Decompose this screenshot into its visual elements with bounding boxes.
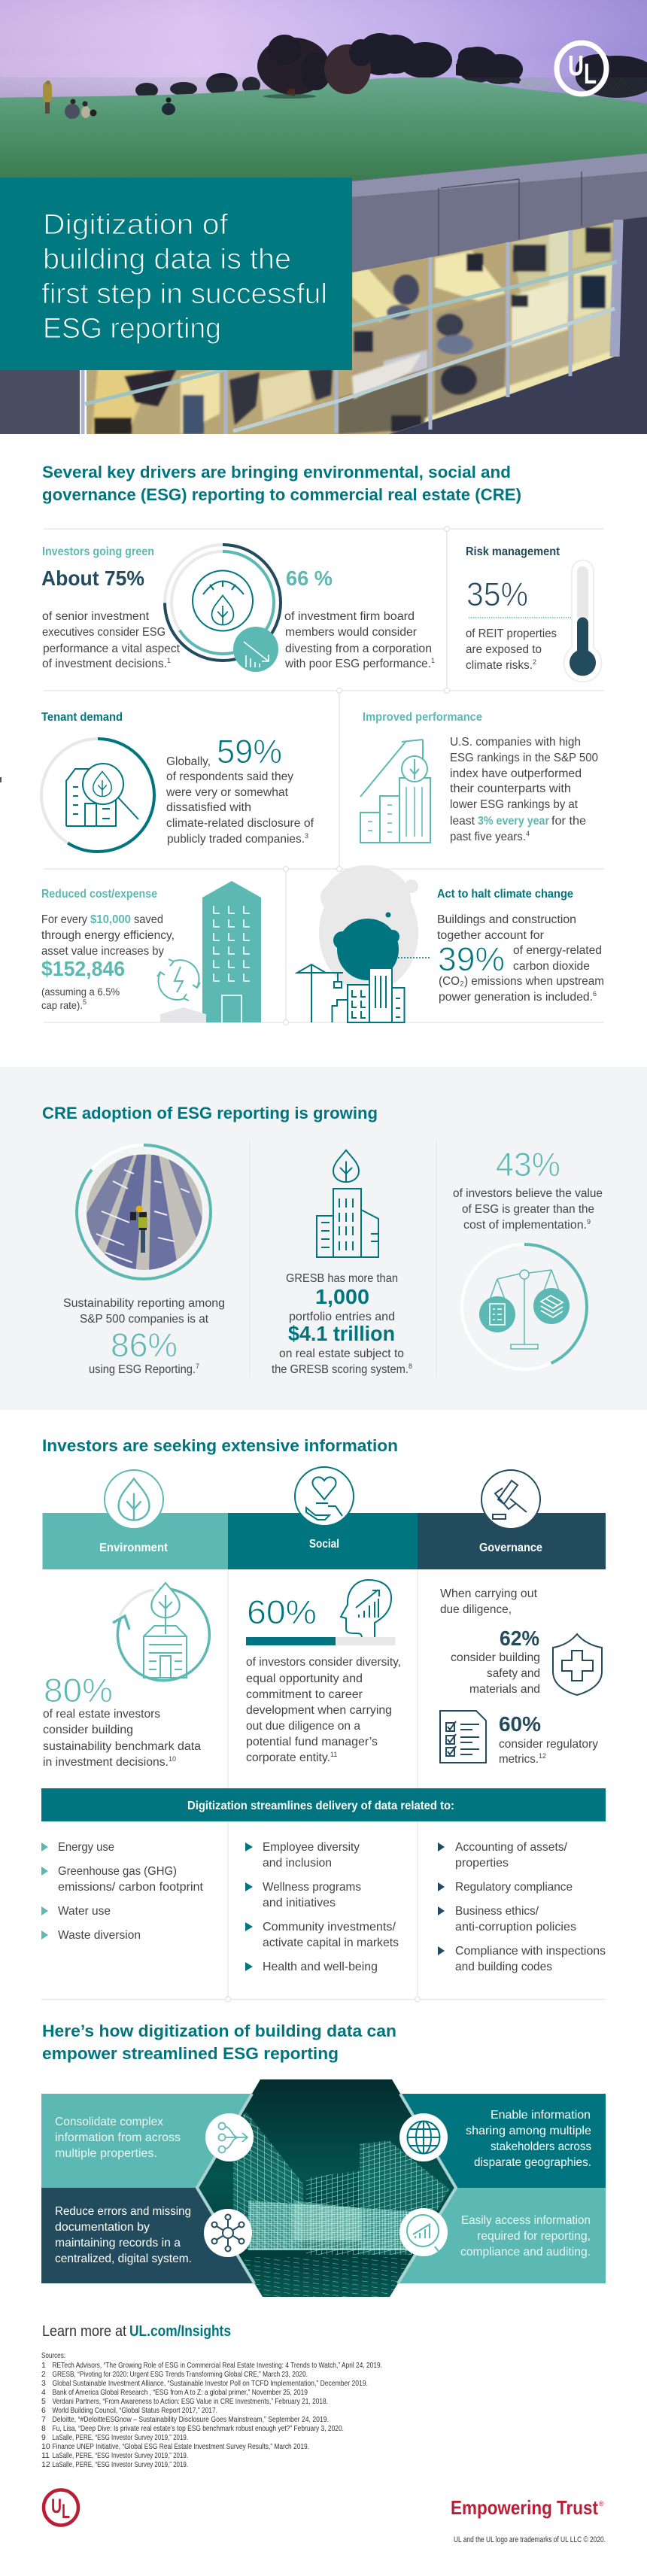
text: real estate investors: of real estate investors bbox=[43, 1708, 160, 1721]
text: savings: saved bbox=[134, 913, 163, 926]
panel: governance stat: When carrying out bbox=[440, 1587, 538, 1600]
sources list: Finance UNEP Initiative, “Global ESG Real Estate Investment Survey Results,” March 2019. bbox=[53, 2442, 309, 2451]
sources list: 3 bbox=[41, 2379, 46, 2388]
column headers: environment social governance: Governance bbox=[479, 1542, 542, 1554]
heading: CRE adoption of ESG reporting is growing bbox=[42, 1104, 378, 1122]
text: enable sharing: stakeholders across bbox=[491, 2140, 591, 2153]
text: savings: $152,846 bbox=[41, 957, 125, 980]
sources list bbox=[41, 2351, 382, 2469]
panel: reduced cost bbox=[41, 881, 261, 1022]
icon: UL logo red bbox=[44, 2490, 78, 2525]
text: GRESB: on real estate subject to bbox=[279, 1347, 404, 1360]
text: board members: members would consider bbox=[285, 626, 418, 639]
text: board members: divesting from a corporation bbox=[285, 642, 432, 655]
panel: risk management bbox=[466, 545, 602, 682]
sources list: LaSalle, PERE, “ESG Investor Survey 2019,” 2019. bbox=[53, 2433, 188, 2442]
list: social data: Employee diversity bbox=[263, 1841, 360, 1854]
background trees bbox=[135, 33, 647, 98]
text: board members bbox=[284, 610, 435, 670]
column headers: environment social governance: Environment bbox=[99, 1542, 168, 1554]
text: enable sharing bbox=[466, 2109, 591, 2169]
text: S&P 500: their counterparts with bbox=[450, 782, 571, 795]
text: real estate investors: consider building bbox=[43, 1724, 133, 1736]
text: 59% of respondents: 3 bbox=[305, 832, 308, 840]
sources list: 5 bbox=[41, 2397, 46, 2406]
list: environment data: Greenhouse gas (GHG) bbox=[58, 1865, 177, 1878]
text: savings bbox=[41, 913, 175, 1011]
text: GRESB: 1,000 bbox=[315, 1285, 369, 1308]
text: S&P 500: lower ESG rankings by at bbox=[450, 798, 579, 811]
stat: 62%: consider building bbox=[451, 1651, 540, 1664]
stat: 60% regulatory bbox=[499, 1712, 598, 1766]
text: 43% of investors: cost of implementation. bbox=[463, 1219, 587, 1232]
stat: about 75%: About 75% bbox=[41, 567, 144, 590]
panel: tenant demand: Tenant demand bbox=[41, 711, 123, 724]
list: environment data: Waste diversion bbox=[58, 1929, 141, 1942]
text: enable sharing: Enable information bbox=[491, 2109, 591, 2122]
foreground trees bbox=[257, 35, 373, 99]
text: diversity: 11 bbox=[330, 1751, 337, 1758]
text: reduce errors bbox=[55, 2205, 192, 2265]
window mullions and transoms bbox=[83, 220, 618, 434]
sources list: 6 bbox=[41, 2406, 46, 2415]
text: enable sharing: sharing among multiple bbox=[466, 2125, 591, 2137]
sources list: 12 bbox=[41, 2460, 50, 2469]
panel: tenant demand bbox=[41, 711, 314, 852]
column headers: environment social governance: Social bbox=[309, 1538, 339, 1551]
icon: checklist bbox=[440, 1711, 486, 1763]
text: 39% of emissions: carbon dioxide bbox=[513, 960, 590, 973]
text: 39% of emissions: 6 bbox=[593, 990, 597, 998]
icon: governance gavel bbox=[481, 1470, 540, 1529]
list: social data: Health and well-being bbox=[263, 1961, 378, 1973]
panel: investors going green bbox=[41, 545, 435, 672]
text: GRESB bbox=[272, 1272, 412, 1376]
text: 59% of respondents bbox=[166, 734, 314, 846]
text: 39% of emissions: together account for bbox=[437, 929, 545, 942]
sources list: Verdani Partners, “From Awareness to Action: ESG Value in CRE Investments,” February 21, 2018. bbox=[53, 2397, 328, 2406]
stat: 62% bbox=[451, 1627, 540, 1696]
text: 39% of emissions: power generation is included. bbox=[439, 991, 593, 1004]
list: governance data: anti-corruption policies bbox=[455, 1921, 576, 1934]
panel: benefit quadrants bbox=[41, 2079, 606, 2297]
text: S&P 500: index have outperformed bbox=[450, 767, 582, 780]
office window interior bbox=[87, 222, 615, 434]
text: GRESB: $4.1 trillion bbox=[288, 1322, 395, 1345]
text: sustainability reporting: Sustainability reporting among bbox=[63, 1297, 225, 1310]
text: real estate investors bbox=[43, 1708, 201, 1769]
icon: UL logo red: L bbox=[62, 2500, 70, 2523]
text: 43% of investors: 9 bbox=[587, 1218, 591, 1226]
sources list: GRESB, “Pivoting for 2020: Urgent ESG Trends Transforming Global CRE,” March 23, 2020. bbox=[53, 2370, 308, 2379]
text: diversity: potential fund manager’s bbox=[246, 1736, 378, 1748]
list: governance data: Compliance with inspections bbox=[455, 1945, 606, 1958]
text: diversity: out due diligence on a bbox=[246, 1720, 360, 1733]
text: board members: of investment firm board bbox=[284, 610, 415, 623]
icon: UL logo red: U bbox=[51, 2495, 62, 2517]
icon: rising bars and leaf bbox=[360, 740, 430, 843]
chart: 43% ring with scale bbox=[462, 1244, 587, 1369]
sources list: Fu, Lisa, “Deep Dive: Is private real estate’s top ESG benchmark robust enough yet?” February 3, 2020. bbox=[53, 2424, 344, 2433]
text: savings: through energy efficiency, bbox=[41, 929, 175, 942]
banner: digitization streamlines bbox=[41, 1788, 606, 1821]
list: environment data: Energy use bbox=[58, 1841, 114, 1854]
text: 59% of respondents: 59% bbox=[217, 734, 282, 770]
list: governance data: properties bbox=[455, 1857, 509, 1870]
graphic: tree and city bbox=[297, 865, 430, 1022]
icon: UL logo white: U bbox=[568, 50, 584, 82]
panel: risk management: Risk management bbox=[466, 545, 560, 558]
text: 59% of respondents: of respondents said they bbox=[166, 770, 293, 783]
list: social data: and inclusion bbox=[263, 1857, 332, 1870]
text: 59% of respondents: were very or somewhat bbox=[166, 786, 289, 799]
people on the lawn bbox=[43, 80, 175, 119]
list: social data: Wellness programs bbox=[263, 1881, 361, 1894]
text: diversity bbox=[246, 1656, 401, 1764]
text: real estate investors: in investment decisions. bbox=[43, 1756, 169, 1769]
heading: how digitization empowers bbox=[42, 2022, 396, 2063]
banner: digitization streamlines: Digitization streamlines delivery of data related to: bbox=[187, 1800, 454, 1812]
stat: 62%: materials and bbox=[469, 1683, 540, 1696]
list: governance data: Accounting of assets/ bbox=[455, 1841, 568, 1854]
hero title panel: first step in successful bbox=[41, 278, 327, 310]
text: REIT: of REIT properties bbox=[466, 627, 557, 640]
icon: network bbox=[204, 2209, 252, 2257]
lawn bbox=[0, 77, 647, 181]
text: senior executives: of senior investment bbox=[42, 610, 150, 623]
text: reduce errors: centralized, digital system. bbox=[55, 2252, 192, 2265]
text: REIT bbox=[466, 627, 557, 672]
text: easily access: required for reporting, bbox=[477, 2230, 591, 2243]
sources list: RETech Advisors, “The Growing Role of ESG in Commercial Real Estate Investing: 4 Trends to Watch,” April 24, 2019. bbox=[53, 2361, 382, 2370]
stat: 62%: safety and bbox=[487, 1667, 540, 1680]
text: 43% of investors bbox=[453, 1147, 603, 1232]
icon: leaf and buildings bbox=[317, 1150, 378, 1257]
icon: environment leaf bbox=[105, 1470, 163, 1529]
text: GRESB: portfolio entries and bbox=[289, 1311, 395, 1323]
text: 43% of investors: of ESG is greater than the bbox=[462, 1203, 594, 1216]
text: sustainability reporting: 7 bbox=[196, 1362, 199, 1370]
sources list: 9 bbox=[41, 2433, 46, 2442]
text: board members: with poor ESG performance. bbox=[284, 658, 431, 670]
text: savings: For every bbox=[41, 913, 87, 926]
stat: 60% regulatory: metrics. bbox=[499, 1753, 539, 1766]
panel: climate change: Act to halt climate change bbox=[437, 888, 573, 901]
heading: investors seeking information: Investors are seeking extensive information bbox=[42, 1436, 398, 1455]
text: savings: cap rate). bbox=[41, 999, 83, 1011]
text: S&P 500: for the bbox=[551, 815, 586, 828]
text: consolidate: Consolidate complex bbox=[55, 2116, 163, 2128]
text: savings: (assuming a 6.5% bbox=[41, 986, 120, 998]
text: 39% of emissions bbox=[437, 913, 604, 1004]
icon: thermometer bbox=[563, 560, 602, 682]
list: governance data: and building codes bbox=[455, 1961, 552, 1973]
sources list: 10 bbox=[41, 2442, 50, 2451]
sources list: Bank of America Global Research , “ESG from A to Z: a global primer,” November 25, 2019 bbox=[53, 2388, 308, 2397]
tagline: empowering trust: ® bbox=[599, 2500, 604, 2508]
text: S&P 500: 3% every year bbox=[478, 815, 549, 828]
text: S&P 500: least bbox=[450, 815, 475, 828]
text: S&P 500: U.S. companies with high bbox=[450, 736, 581, 749]
hero title panel: building data is the bbox=[43, 244, 291, 275]
list: social data bbox=[245, 1841, 399, 1973]
chart: 59% ring with building bbox=[41, 739, 154, 852]
heading: key drivers: Several key drivers are bringing environmental, social and bbox=[42, 463, 511, 481]
text: sustainability reporting: 86% bbox=[111, 1327, 178, 1364]
link: learn more bbox=[42, 2323, 231, 2340]
list: environment data: emissions/ carbon footprint bbox=[58, 1881, 204, 1894]
text: 59% of respondents: dissatisfied with bbox=[166, 801, 251, 814]
stat: 35%: 35% bbox=[466, 576, 528, 613]
text: savings: asset value increases by bbox=[41, 945, 164, 958]
text: enable sharing: disparate geographies. bbox=[474, 2156, 591, 2169]
text: GRESB: GRESB has more than bbox=[286, 1272, 398, 1285]
text: consolidate: information from across bbox=[55, 2131, 181, 2144]
panel: CRE adoption section bbox=[0, 1067, 647, 1410]
hero title panel: Digitization of bbox=[43, 209, 228, 241]
icon: teal building bbox=[202, 881, 261, 1022]
panel: governance stat: due diligence, bbox=[440, 1603, 512, 1616]
sources list: 2 bbox=[41, 2370, 46, 2379]
hero title panel: ESG reporting bbox=[43, 313, 221, 345]
text: reduce errors: Reduce errors and missing bbox=[55, 2205, 191, 2218]
text: diversity: commitment to career bbox=[246, 1688, 363, 1701]
text: reduce errors: documentation by bbox=[55, 2221, 150, 2234]
link: learn more: Learn more at bbox=[42, 2323, 126, 2340]
panel: environment stat bbox=[43, 1583, 209, 1769]
icon: building cycle bbox=[113, 1583, 209, 1681]
sources list: 8 bbox=[41, 2424, 46, 2433]
text: 39% of emissions: 39% bbox=[438, 941, 505, 978]
panel: environment stat: 80% bbox=[44, 1672, 113, 1709]
text: senior executives: executives consider ESG bbox=[42, 626, 166, 639]
sources list: 7 bbox=[41, 2415, 46, 2424]
panel: reduced cost: Reduced cost/expense bbox=[41, 888, 157, 901]
hero title panel bbox=[0, 178, 352, 370]
panel: social stat: 60% bbox=[247, 1594, 317, 1631]
icon: consolidate bbox=[205, 2113, 254, 2161]
icon: globe bbox=[399, 2113, 448, 2161]
text: GRESB: the GRESB scoring system. bbox=[272, 1363, 409, 1376]
text: easily access: Easily access information bbox=[461, 2214, 591, 2227]
text: 59% of respondents: Globally, bbox=[166, 755, 211, 768]
stat: 62%: 62% bbox=[500, 1627, 539, 1650]
icon: magnifier chart bbox=[399, 2208, 448, 2256]
stat: 66 %: 66 % bbox=[286, 567, 333, 590]
text: 59% of respondents: publicly traded companies. bbox=[167, 833, 305, 846]
image: wireframe city hexagon bbox=[197, 2079, 456, 2297]
list: environment data bbox=[41, 1841, 204, 1942]
bar chart: 60% bbox=[246, 1637, 396, 1645]
sources list: Global Sustainable Investment Alliance, “Sustainable Investor Poll on TCFD Implementation,” December 2019. bbox=[53, 2379, 368, 2388]
heading: key drivers: governance (ESG) reporting to commercial real estate (CRE) bbox=[42, 485, 521, 504]
list: social data: and initiatives bbox=[263, 1897, 336, 1909]
text: REIT: 2 bbox=[533, 658, 536, 666]
icon: UL logo white bbox=[557, 43, 606, 94]
sources list: 11 bbox=[41, 2451, 50, 2460]
trademark note: UL and the UL logo are trademarks of UL LLC © 2020. bbox=[454, 2535, 606, 2544]
text: 39% of emissions: Buildings and construction bbox=[437, 913, 576, 926]
chart: double ring gauge bbox=[165, 545, 281, 672]
heading: how digitization empowers: Here’s how digitization of building data can bbox=[42, 2022, 396, 2040]
text: S&P 500: 4 bbox=[526, 830, 530, 837]
text: S&P 500 bbox=[450, 736, 598, 843]
text: diversity: equal opportunity and bbox=[246, 1672, 363, 1685]
text: GRESB: 8 bbox=[409, 1362, 412, 1370]
icon: gray house bbox=[160, 1007, 206, 1022]
heading: how digitization empowers: empower streamlined ESG reporting bbox=[42, 2044, 339, 2063]
tagline: empowering trust: Empowering Trust bbox=[451, 2496, 598, 2519]
stat: 60% regulatory: consider regulatory bbox=[499, 1738, 598, 1751]
sources list: 1 bbox=[41, 2361, 46, 2370]
text: consolidate: multiple properties. bbox=[55, 2147, 157, 2160]
list: governance data: Business ethics/ bbox=[455, 1905, 539, 1918]
text: board members: 1 bbox=[431, 657, 435, 664]
panel: climate change bbox=[297, 865, 604, 1022]
text: 39% of emissions: (CO₂) emissions when upstream bbox=[439, 975, 604, 988]
text: savings: $10,000 bbox=[90, 913, 131, 926]
icon: shield with cross bbox=[553, 1634, 602, 1695]
text: sustainability reporting: S&P 500 companies is at bbox=[80, 1313, 209, 1326]
hero photo: green roof and office windows bbox=[0, 0, 647, 436]
text: diversity: of investors consider diversity, bbox=[246, 1656, 401, 1669]
text: real estate investors: 10 bbox=[169, 1755, 176, 1763]
icon: energy cycle bbox=[157, 959, 200, 1001]
text: easily access bbox=[460, 2214, 591, 2259]
text: reduce errors: maintaining records in a bbox=[55, 2237, 181, 2249]
panel: improved performance bbox=[360, 711, 598, 843]
text: diversity: development when carrying bbox=[246, 1704, 392, 1717]
sources list: 4 bbox=[41, 2388, 46, 2397]
sources list: LaSalle, PERE, “ESG Investor Survey 2019,” 2019. bbox=[53, 2460, 188, 2469]
heading: key drivers bbox=[42, 463, 521, 504]
text: REIT: climate risks. bbox=[466, 659, 533, 672]
stat: 60% regulatory: 12 bbox=[539, 1752, 546, 1760]
text: senior executives: 1 bbox=[167, 657, 171, 664]
text: consolidate bbox=[55, 2116, 181, 2160]
icon: social heart and hand bbox=[295, 1467, 354, 1526]
sources list: Sources: bbox=[41, 2351, 65, 2360]
panel: improved performance: Improved performance bbox=[363, 711, 482, 724]
text: senior executives: of investment decisions. bbox=[42, 658, 167, 670]
text: REIT: are exposed to bbox=[466, 643, 542, 656]
stat: 60% regulatory: 60% bbox=[499, 1712, 541, 1736]
list: governance data bbox=[438, 1841, 606, 1973]
panel: governance stat bbox=[440, 1587, 602, 1766]
icon: head with chart bbox=[341, 1580, 391, 1637]
text: senior executives: performance a vital aspect bbox=[43, 642, 181, 655]
chart: 86% ring with solar photo bbox=[77, 1145, 211, 1279]
text: sustainability reporting bbox=[63, 1297, 225, 1376]
text: 59% of respondents: climate-related disclosure of bbox=[166, 817, 314, 830]
text: savings: 5 bbox=[83, 998, 87, 1006]
text: 39% of emissions: of energy-related bbox=[513, 944, 602, 957]
icon: UL logo white: L bbox=[584, 59, 597, 90]
sources list: LaSalle, PERE, “ESG Investor Survey 2019,” 2019. bbox=[53, 2451, 188, 2460]
building parapet and cladding bbox=[352, 153, 647, 434]
link: learn more: UL.com/Insights bbox=[129, 2323, 231, 2340]
text: real estate investors: sustainability benchmark data bbox=[43, 1740, 201, 1753]
sources list: World Building Council, “Global Status Report 2017,” 2017. bbox=[53, 2406, 217, 2415]
text: S&P 500: past five years. bbox=[450, 831, 526, 843]
list: governance data: Regulatory compliance bbox=[455, 1881, 573, 1894]
text: S&P 500: ESG rankings in the S&P 500 bbox=[450, 752, 598, 764]
list: environment data: Water use bbox=[58, 1905, 111, 1918]
panel: social stat bbox=[246, 1580, 401, 1764]
text: senior executives bbox=[42, 610, 181, 670]
text: 43% of investors: of investors believe the value bbox=[453, 1187, 603, 1200]
subheading: Investors going green bbox=[42, 545, 154, 558]
list: social data: Community investments/ bbox=[263, 1921, 396, 1934]
column headers: environment social governance bbox=[42, 1467, 606, 1569]
text: easily access: compliance and auditing. bbox=[460, 2246, 591, 2259]
text: diversity: corporate entity. bbox=[246, 1751, 330, 1764]
list: social data: activate capital in markets bbox=[263, 1937, 399, 1949]
text: 43% of investors: 43% bbox=[496, 1147, 560, 1183]
sources list: Deloitte, “#DeloitteESGnow – Sustainability Disclosure Goes Mainstream,” September 24, 2019. bbox=[53, 2415, 329, 2424]
text: sustainability reporting: using ESG Reporting. bbox=[89, 1363, 196, 1376]
